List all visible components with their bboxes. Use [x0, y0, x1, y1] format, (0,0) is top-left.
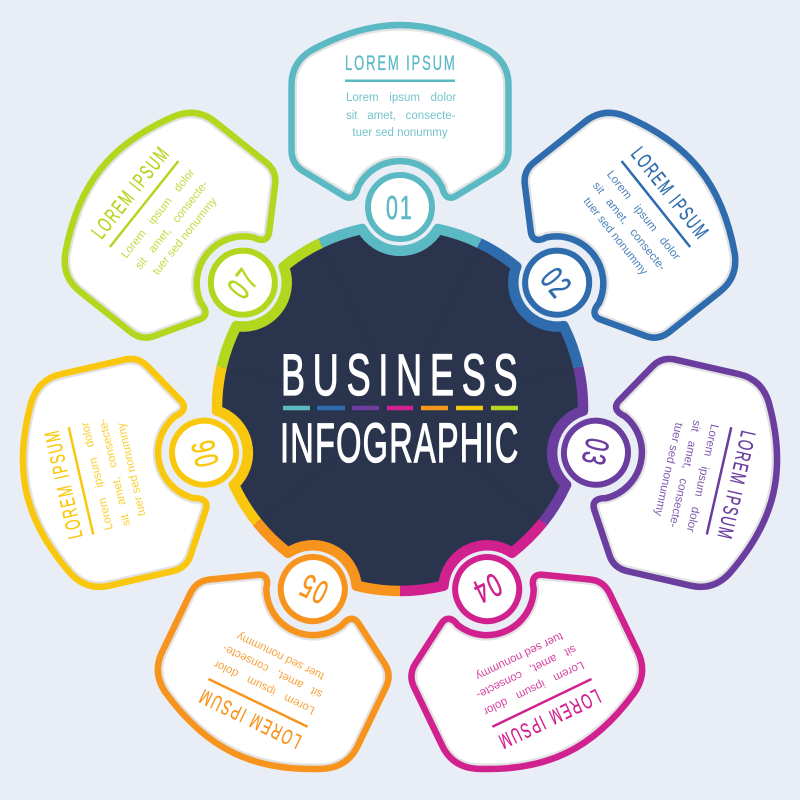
underline 01 [345, 80, 455, 82]
body text 04: sit amet, consecte- [474, 642, 578, 701]
body text 07: Lorem ipsum dolor [119, 167, 197, 261]
number badge 04 [444, 546, 530, 632]
body text 05: tuer sed nonummy [235, 630, 326, 682]
body text 03: tuer sed nonummy [652, 421, 685, 517]
body text 01: sit amet, consecte- [346, 110, 456, 122]
body text 04: tuer sed nonummy [474, 630, 565, 682]
body text 07 [119, 167, 225, 283]
number badge 02: 02 [533, 261, 580, 305]
panel 06 [20, 356, 240, 590]
body text 06 [79, 413, 150, 531]
panel 07 [61, 110, 279, 341]
heading 02: LOREM IPSUM [626, 142, 715, 245]
heading 03: LOREM IPSUM [712, 429, 761, 543]
heading 04: LOREM IPSUM [494, 684, 605, 754]
body text 03 [650, 415, 720, 533]
heading 01: LOREM IPSUM [345, 51, 457, 75]
number badge 01: 01 [386, 189, 414, 226]
colored dashes [283, 406, 518, 410]
number badge 01 [368, 175, 432, 239]
heading 06: LOREM IPSUM [39, 427, 87, 541]
body text 06: tuer sed nonummy [115, 421, 148, 517]
panel 02 [521, 110, 739, 341]
body text 02: tuer sed nonummy [581, 196, 650, 278]
heading 07: LOREM IPSUM [86, 141, 175, 243]
number badge 07 [198, 238, 288, 328]
body text 02: sit amet, consecte- [590, 180, 668, 273]
panel 03 [560, 356, 780, 590]
body text 07: sit amet, consecte- [133, 179, 211, 272]
title [280, 343, 525, 474]
body text 02 [577, 169, 682, 284]
body text 05: sit amet, consecte- [221, 642, 325, 700]
number badge 06: 06 [184, 435, 226, 470]
body text 01 [346, 92, 456, 139]
body text 01: Lorem ipsum dolor [346, 92, 456, 104]
body text 03: Lorem ipsum dolor [684, 423, 720, 533]
body text 03: sit amet, consecte- [666, 419, 703, 529]
number badge 03 [558, 414, 634, 491]
body text 06: Lorem ipsum dolor [79, 421, 116, 531]
number badge 02 [512, 238, 602, 328]
central hub [208, 229, 592, 604]
body text 04: Lorem ipsum dolor [481, 658, 586, 717]
body text 05: Lorem ipsum dolor [212, 657, 317, 716]
body text 01: tuer sed nonummy [352, 127, 448, 139]
underline 04 [492, 678, 592, 728]
body text 07: tuer sed nonummy [151, 195, 220, 278]
panel 05 [154, 554, 392, 772]
underline 06 [67, 427, 94, 535]
underline 03 [706, 427, 733, 535]
title line: BUSINESS: BUSINESS [281, 343, 525, 408]
title line: INFOGRAPHIC: INFOGRAPHIC [280, 412, 520, 474]
panel 01 [292, 25, 508, 239]
number badge 05: 05 [293, 566, 334, 611]
body text 06: sit amet, consecte- [97, 417, 133, 527]
number badge 04: 04 [467, 566, 507, 611]
body text 04 [466, 627, 586, 717]
body text 02: Lorem ipsum dolor [604, 169, 682, 263]
panel 04 [408, 554, 646, 772]
number badge 05 [270, 546, 356, 632]
number badge 06 [166, 414, 242, 491]
number badge 07: 07 [220, 261, 266, 306]
underline 02 [621, 160, 691, 248]
underline 05 [208, 678, 308, 728]
number badge 03: 03 [574, 435, 616, 470]
body text 05 [212, 626, 332, 716]
underline 07 [109, 160, 179, 248]
heading 05: LOREM IPSUM [194, 684, 305, 754]
